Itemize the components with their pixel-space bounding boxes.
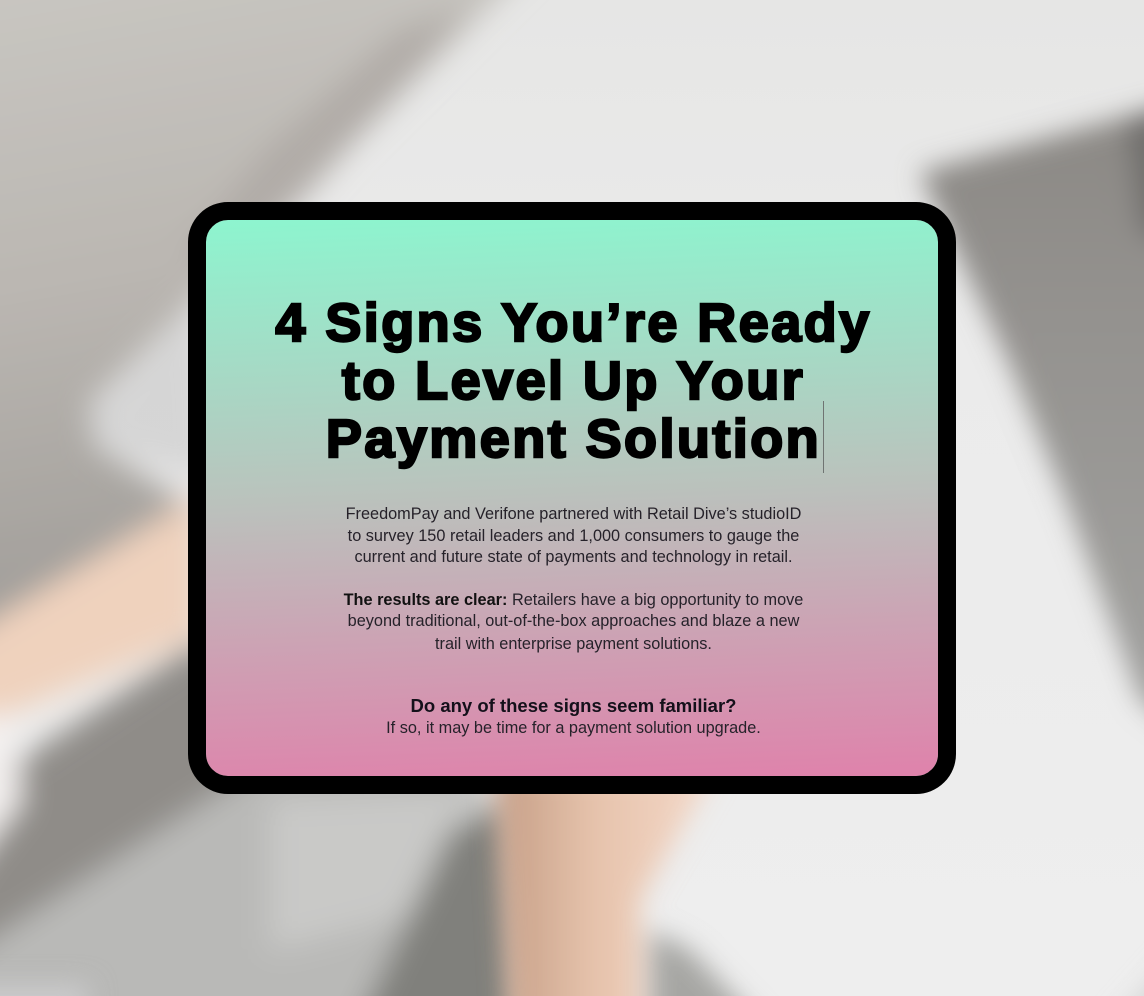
results paragraph: beyond traditional, out-of-the-box approaches and blaze a new <box>348 612 799 630</box>
results paragraph: trail with enterprise payment solutions. <box>435 635 712 653</box>
closing question: If so, it may be time for a payment solution upgrade. <box>386 719 761 737</box>
panel: gradient card with black border <box>188 202 956 794</box>
closing question: Do any of these signs seem familiar? <box>411 695 736 716</box>
intro paragraph: FreedomPay and Verifone partnered with Retail Dive’s studioID <box>346 505 801 523</box>
results paragraph: The results are clear: Retailers have a big opportunity to move <box>344 591 803 609</box>
intro paragraph <box>346 505 801 566</box>
results paragraph <box>344 591 803 653</box>
title: to Level Up Your <box>342 351 805 411</box>
intro paragraph: current and future state of payments and technology in retail. <box>354 548 793 566</box>
title: 4 Signs You’re Ready <box>275 293 872 353</box>
text cursor <box>823 401 824 473</box>
closing question <box>386 695 761 737</box>
title: Payment Solution <box>326 409 821 469</box>
intro paragraph: to survey 150 retail leaders and 1,000 consumers to gauge the <box>348 527 799 545</box>
